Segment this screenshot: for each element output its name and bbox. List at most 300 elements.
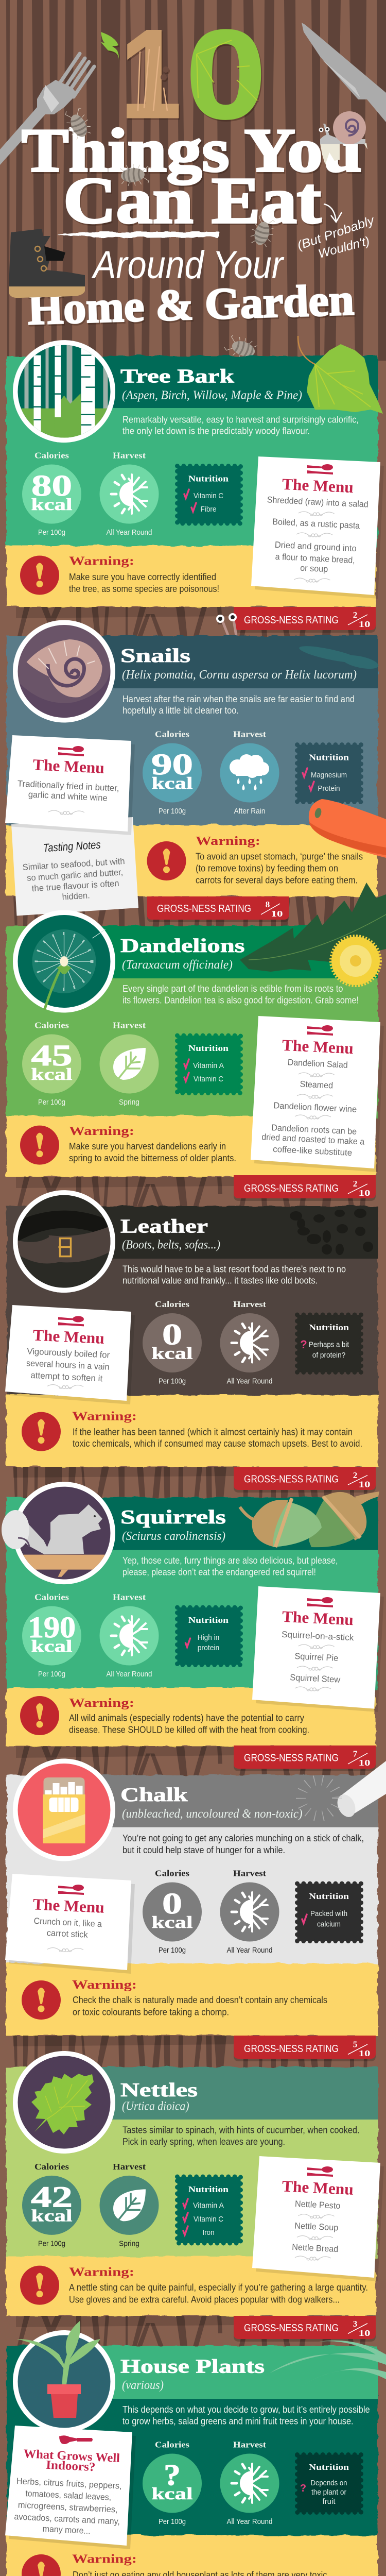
- menu card: [5, 1305, 135, 1404]
- tasting notes card: hidden.: [62, 890, 90, 902]
- illustration: dandelion clock: [13, 910, 115, 1013]
- tasting notes card: the true flavour is often: [31, 878, 119, 893]
- description: [122, 1833, 364, 1855]
- card list: microgreens, strawberries,: [17, 2500, 118, 2515]
- description: Yep, those cute, furry things are also delicious, but please,: [122, 1555, 338, 1566]
- menu card: attempt to soften it: [30, 1370, 103, 1383]
- illustration: large plant blades: [270, 2341, 386, 2395]
- stat: harvest: All Year Round: [106, 1670, 152, 1679]
- card list: [14, 2476, 122, 2536]
- menu card: Boiled, as a rustic pasta: [272, 517, 360, 531]
- section: tree bark: [6, 336, 384, 607]
- gross-ness rating: tree bark: [234, 607, 376, 633]
- nutrition box: Nutrition: [309, 1891, 349, 1901]
- stat: harvest: Harvest: [113, 2162, 146, 2172]
- menu card: Nettle Bread: [292, 2242, 339, 2254]
- gross-ness rating: leather: 2: [353, 1470, 357, 1480]
- stat: calories: 190: [28, 1611, 76, 1644]
- panel: leather header: [98, 1206, 378, 1259]
- wood gap: [13, 2036, 369, 2079]
- stat: calories: Per 100g: [38, 1098, 65, 1107]
- warning: To avoid an upset stomach, ‘purge’ the snails: [196, 851, 363, 861]
- stat: harvest: Harvest: [113, 1592, 146, 1602]
- stat: harvest: [220, 1299, 279, 1386]
- description: [122, 414, 359, 436]
- wood gap: [16, 1747, 367, 1783]
- gross-ness rating: snails: GROSS-NESS RATING: [157, 903, 251, 914]
- section: house plants: [5, 2321, 386, 2576]
- panel: squirrels header: [98, 1498, 378, 1550]
- tasting notes card: [11, 817, 138, 916]
- wood gap: [16, 607, 367, 643]
- card list: Herbs, citrus fruits, peppers,: [16, 2476, 122, 2491]
- title: Leather: [120, 1215, 208, 1237]
- description: Harvest after the rain when the snails are far easier to find and: [122, 693, 355, 704]
- stat: harvest: All Year Round: [106, 528, 152, 537]
- title line: can eat: Can Eat: [63, 164, 321, 237]
- menu card: garlic and white wine: [28, 789, 108, 803]
- stat: calories: Calories: [155, 1868, 189, 1878]
- stat: calories: [143, 730, 202, 816]
- warning: toxic chemicals, which if consumed may cause stomach upsets. Best to avoid.: [73, 1438, 362, 1449]
- panel: leather warning: [6, 1395, 378, 1467]
- menu card: Crunch on it, like a: [33, 1916, 102, 1929]
- gross-ness rating: leather: 10: [358, 1480, 371, 1489]
- header illustration: knife: [302, 23, 386, 122]
- menu card: The Menu: [282, 475, 354, 496]
- stat: calories: kcal: [31, 2207, 72, 2225]
- wood gap below snails: [13, 896, 369, 940]
- arrow to aside: [324, 204, 342, 222]
- panel: snails header: [98, 636, 378, 688]
- subtitle: (unbleached, uncoloured & non-toxic): [122, 1807, 303, 1821]
- warning: (to remove toxins) by feeding them on: [196, 863, 338, 874]
- menu card: Vigourously boiled for: [27, 1346, 110, 1360]
- warning: [20, 2266, 368, 2305]
- description: Every single part of the dandelion is edible from its roots to: [122, 983, 343, 994]
- panel: house plants body: [7, 2346, 378, 2537]
- nutrition box: Nutrition: [188, 1615, 229, 1625]
- menu card: [251, 456, 384, 599]
- panel: nettles header: [98, 2067, 378, 2120]
- stat: calories: kcal: [31, 1065, 72, 1084]
- nutrition box: [297, 2454, 361, 2512]
- warning: the tree, as some species are poisonous!: [69, 584, 219, 594]
- decoration: boot tread: [290, 1209, 373, 1255]
- warning: [22, 2552, 329, 2576]
- warning: Warning:: [196, 835, 260, 848]
- title: Nettles: [120, 2079, 198, 2101]
- gross-ness rating: chalk: 10: [358, 2048, 371, 2058]
- stat: calories: Calories: [34, 2162, 69, 2172]
- nutrition box: the plant or: [311, 2488, 346, 2497]
- gross-ness rating: snails: 10: [271, 909, 283, 919]
- panel: dandelions header: [98, 926, 378, 978]
- section: dandelions: [6, 883, 386, 1177]
- stat: harvest: [100, 1592, 159, 1679]
- illustration: chalk box: [13, 1759, 115, 1861]
- menu card: Dandelion flower wine: [273, 1100, 357, 1114]
- nutrition box: Protein: [318, 784, 340, 793]
- menu card: The Menu: [282, 1036, 354, 1057]
- wood gap: [16, 1177, 367, 1213]
- stat: calories: Calories: [34, 1020, 69, 1030]
- warning: Make sure you have correctly identified: [69, 572, 216, 582]
- latin name: (Urtica dioica): [122, 2100, 189, 2113]
- latin name: (Sciurus carolinensis): [122, 1530, 225, 1543]
- gross-ness rating: tree bark: 10: [358, 619, 371, 629]
- stat: calories: Per 100g: [159, 1377, 186, 1386]
- stat: harvest: [100, 1020, 159, 1107]
- title: Squirrels: [120, 1506, 226, 1528]
- stat: harvest: Spring: [119, 1098, 139, 1107]
- menu card: The Menu: [282, 2177, 354, 2198]
- gross-ness rating: squirrels: GROSS-NESS RATING: [244, 1753, 339, 1764]
- nutrition box: High in: [198, 1633, 219, 1642]
- description: its flowers. Dandelion tea is also good for digestion. Grab some!: [122, 994, 359, 1006]
- panel: squirrels body: [6, 1498, 378, 1690]
- warning: Warning:: [69, 1125, 134, 1138]
- menu card: Squirrel-on-a-stick: [282, 1630, 354, 1642]
- icon: boot: [9, 229, 85, 298]
- stat: harvest: All Year Round: [226, 1946, 273, 1955]
- nutrition box: [297, 1315, 361, 1372]
- illustration: carrot: [309, 799, 386, 858]
- description: Tastes similar to spinach, with hints of cucumber, when cooked.: [122, 2125, 360, 2136]
- menu card: Nettle Pesto: [295, 2199, 341, 2211]
- menu card: coffee-like substitute: [273, 1144, 353, 1158]
- stat: calories: kcal: [151, 1345, 192, 1363]
- numeral 0 as leaf: 0: [186, 4, 266, 145]
- stat: calories: Calories: [155, 2440, 189, 2449]
- gross-ness rating: leather: GROSS-NESS RATING: [244, 1474, 339, 1485]
- description: This would have to be a last resort food as there’s next to no: [122, 1264, 346, 1275]
- wood gap: [16, 2316, 367, 2352]
- illustration: squirrel: [2, 1482, 115, 1584]
- stat: harvest: Harvest: [113, 1020, 146, 1030]
- illustration: acorns: [240, 1492, 379, 1547]
- description: Pick in early spring, when leaves are young.: [122, 2136, 285, 2147]
- nutrition box: ?: [300, 2483, 306, 2494]
- warning: [147, 835, 363, 885]
- panel: tree bark header: [98, 356, 378, 408]
- menu card: a flour to make bread,: [275, 552, 355, 565]
- aside: but probably wouldn't: (But Probably: [295, 213, 377, 253]
- panel: squirrels warning: [6, 1688, 376, 1747]
- stat: calories: kcal: [151, 1913, 192, 1932]
- panel: snails body: [7, 636, 378, 827]
- gross-ness rating: dandelions: 2: [353, 1179, 357, 1189]
- stat: calories: 0: [162, 1887, 182, 1920]
- stat: calories: ?: [164, 2458, 181, 2492]
- stat: harvest: [100, 2162, 159, 2248]
- illustration: belt: [13, 1190, 115, 1293]
- menu card: Traditionally fried in butter,: [17, 778, 119, 793]
- nutrition box: calcium: [317, 1920, 341, 1929]
- panel: house plants warning: [6, 2535, 378, 2576]
- menu card: [252, 1586, 384, 1712]
- nutrition box: [177, 466, 241, 523]
- menu card: Squirrel Stew: [290, 1672, 341, 1685]
- gross-ness rating: squirrels: 7: [353, 1749, 358, 1759]
- stat: harvest: [220, 2440, 279, 2526]
- panel: tree bark warning: [6, 546, 376, 607]
- nutrition box: of protein?: [312, 1351, 345, 1360]
- nutrition box: [177, 1036, 241, 1093]
- stat: calories: [22, 1592, 81, 1679]
- warning: If the leather has been tanned (which it almost certainly has) it may contain: [73, 1427, 353, 1437]
- title: Dandelions: [120, 935, 245, 957]
- nutrition box: Vitamin C: [194, 2215, 223, 2224]
- stat: harvest: Harvest: [233, 1299, 266, 1309]
- latin names: (Helix pomatia, Cornu aspersa or Helix lucorum): [122, 668, 357, 682]
- panel: chalk warning: [6, 1963, 378, 2036]
- gross-ness rating: nettles: [234, 2316, 376, 2342]
- warning: spring to avoid the bitterness of older plants.: [69, 1153, 236, 1163]
- numeral 1 in wood: 1: [120, 3, 181, 144]
- stat: harvest: Harvest: [233, 730, 266, 739]
- nutrition box: Nutrition: [309, 1323, 349, 1332]
- menu card: dried and roasted to make a: [261, 1132, 365, 1147]
- stat: calories: Calories: [155, 730, 189, 739]
- stat: calories: Calories: [34, 450, 69, 461]
- stat: calories: 45: [31, 1039, 72, 1072]
- stat: calories: kcal: [151, 774, 192, 793]
- description: please, please don’t eat the endangered red squirrel!: [122, 1566, 316, 1578]
- wood gap: [13, 1467, 369, 1511]
- warning: [20, 1696, 309, 1735]
- description: [122, 2404, 370, 2427]
- nutrition box: Depends on: [311, 2479, 347, 2487]
- warning: A nettle sting can be quite painful, especially if you’re gathering a large quantity.: [69, 2282, 368, 2293]
- icon: snail on title: [319, 111, 367, 165]
- nutrition box: Magnesium: [311, 771, 347, 779]
- gross-ness rating: nettles: 10: [358, 2328, 371, 2338]
- menu card: The Menu: [32, 755, 105, 777]
- card list: avocados, carrots and many,: [14, 2512, 120, 2527]
- menu card: [252, 2156, 384, 2281]
- nutrition box: [297, 1884, 361, 1941]
- menu card: Dried and ground into: [274, 540, 357, 553]
- header illustration: fork: [0, 54, 94, 165]
- stat: harvest: Harvest: [233, 1868, 266, 1878]
- nutrition box: [177, 2177, 241, 2243]
- warning: carrots for several days before eating them.: [196, 875, 358, 885]
- menu card: Squirrel Pie: [294, 1651, 339, 1663]
- subtitle: (various): [122, 2379, 164, 2392]
- stat: calories: [143, 2440, 202, 2526]
- warning: Warning:: [69, 1697, 134, 1710]
- title line: around your: Around Your: [91, 243, 284, 287]
- warning: Warning:: [69, 555, 134, 568]
- description: but it could help stave of hunger for a while.: [122, 1844, 285, 1855]
- illustration: nettle leaf: [13, 2051, 115, 2154]
- warning: [20, 555, 219, 595]
- icon: woodlice on title: [61, 104, 277, 363]
- warning: Warning:: [72, 1410, 137, 1423]
- stat: calories: [22, 2162, 81, 2248]
- stat: calories: kcal: [151, 2485, 192, 2503]
- gross-ness rating: nettles: GROSS-NESS RATING: [244, 2323, 339, 2334]
- stat: calories: kcal: [31, 496, 72, 514]
- nutrition box: Vitamin C: [194, 1075, 223, 1083]
- stat: calories: 90: [151, 748, 193, 781]
- stat: calories: [22, 1020, 81, 1107]
- stat: calories: [143, 1299, 202, 1386]
- stat: harvest: All Year Round: [226, 2517, 273, 2526]
- gross-ness rating: leather: [234, 1467, 376, 1493]
- stat: calories: Per 100g: [38, 1670, 65, 1679]
- stat: calories: Calories: [155, 1299, 189, 1309]
- illustration: chalk stick: [301, 1761, 386, 1820]
- stat: calories: Per 100g: [38, 528, 65, 537]
- nutrition box: fruit: [322, 2497, 336, 2506]
- stat: calories: kcal: [31, 1637, 72, 1656]
- illustration: birch leaf: [298, 336, 383, 414]
- stat: calories: Calories: [34, 1592, 69, 1602]
- icon: trowel: [59, 2435, 93, 2444]
- illustration: snail shell: [13, 620, 115, 722]
- menu card: several hours in a vain: [26, 1358, 110, 1372]
- panel: dandelions body: [6, 926, 378, 1118]
- description: [122, 1264, 346, 1286]
- nutrition box: Nutrition: [309, 2462, 349, 2472]
- description: Remarkably versatile, easy to harvest and surprisingly calorific,: [122, 414, 359, 425]
- description: hopefully a little bit cleaner too.: [122, 705, 239, 716]
- description: [122, 2125, 360, 2147]
- section: chalk: [5, 1759, 386, 2036]
- menu card: [251, 1016, 384, 1172]
- warning: Warning:: [69, 2266, 134, 2279]
- warning: [22, 1978, 327, 2020]
- tasting notes card: so much garlic and butter,: [27, 867, 124, 883]
- gross-ness rating: chalk: 5: [353, 2039, 357, 2049]
- panel: chalk body: [7, 1775, 378, 1965]
- gross-ness rating: chalk: GROSS-NESS RATING: [244, 2043, 339, 2055]
- menu card: Nettle Soup: [294, 2221, 339, 2233]
- gross-ness rating: dandelions: [234, 1175, 376, 1201]
- stat: harvest: After Rain: [234, 807, 266, 816]
- description: the only let down is the predictably woody flavour.: [122, 425, 310, 436]
- panel: tree bark body: [6, 356, 378, 548]
- gross-ness rating: chalk: [234, 2036, 376, 2061]
- stat: harvest: Harvest: [113, 450, 146, 461]
- warning: All wild animals (especially rodents) have the potential to carry: [69, 1713, 304, 1723]
- illustration: dandelion flower: [331, 937, 380, 985]
- gross-ness rating: snails: 8: [266, 900, 270, 909]
- what grows well card: [5, 2426, 136, 2549]
- section: snails: [5, 613, 386, 916]
- stat: calories: [22, 450, 81, 537]
- stat: calories: 42: [31, 2180, 73, 2213]
- menu card: Shredded (raw) into a salad: [267, 495, 369, 510]
- stat: calories: Per 100g: [38, 2239, 65, 2248]
- section: leather: [5, 1190, 378, 1467]
- illustration: birch forest: [13, 340, 115, 443]
- nutrition box: Nutrition: [188, 474, 229, 483]
- warning: Warning:: [72, 2552, 137, 2566]
- section: squirrels: [2, 1482, 384, 1747]
- menu card: The Menu: [32, 1326, 105, 1347]
- tasting notes card: Tasting Notes: [43, 838, 101, 854]
- menu card: [5, 735, 135, 835]
- brush stroke divider: [57, 232, 219, 238]
- menu card: The Menu: [282, 1607, 354, 1629]
- nutrition box: Perhaps a bit: [309, 1341, 349, 1349]
- gross-ness rating: snails: [147, 896, 289, 922]
- title line: home and garden: Home & Garden: [27, 275, 355, 334]
- menu card: carrot stick: [46, 1928, 89, 1940]
- stat: calories: Per 100g: [159, 1946, 186, 1955]
- warning: or toxic colourants before taking a chomp.: [73, 2007, 229, 2018]
- stat: calories: [143, 1868, 202, 1955]
- nutrition box: Fibre: [201, 505, 216, 514]
- illustration: potted plant: [13, 2321, 115, 2433]
- warning: [22, 1410, 362, 1451]
- aside: but probably wouldn't: Wouldn't): [317, 234, 371, 261]
- nutrition box: Vitamin A: [193, 1061, 224, 1070]
- stat: harvest: [220, 730, 279, 816]
- nutrition box: Packed with: [310, 1909, 347, 1918]
- nutrition box: [177, 1607, 241, 1665]
- icon: snail eyes: [216, 613, 237, 639]
- stat: calories: 80: [31, 469, 72, 502]
- card list: tomatoes, salad leaves,: [25, 2488, 112, 2502]
- decoration: snail trail: [298, 643, 380, 671]
- warning: Use gloves and be extra careful. Avoid places popular with dog walkers...: [69, 2294, 340, 2304]
- numeral 1 in wood: [101, 3, 181, 144]
- card heading: [23, 2447, 120, 2474]
- panel: nettles warning: [6, 2257, 376, 2316]
- gross-ness rating: dandelions: 10: [358, 1188, 371, 1198]
- title: House Plants: [120, 2356, 265, 2378]
- section: nettles: [6, 2051, 384, 2316]
- big number 10: [101, 3, 266, 145]
- gross-ness rating: tree bark: 2: [353, 610, 357, 620]
- warning: Warning:: [72, 1978, 137, 1992]
- title: Tree Bark: [120, 366, 235, 387]
- nutrition box: Vitamin A: [193, 2201, 224, 2210]
- latin name: (Taraxacum officinale): [122, 958, 233, 972]
- menu card: The Menu: [32, 1895, 105, 1917]
- stat: harvest: Spring: [119, 2239, 139, 2248]
- warning: disease. These SHOULD be killed off with the heat from cooking.: [69, 1725, 309, 1735]
- gross-ness rating: squirrels: [234, 1745, 376, 1771]
- nutrition box: Nutrition: [188, 1043, 229, 1053]
- gross-ness rating: tree bark: GROSS-NESS RATING: [244, 615, 339, 626]
- menu card: Dandelion Salad: [287, 1057, 348, 1070]
- card list: many more...: [42, 2524, 91, 2536]
- warning: Make sure you harvest dandelions early in: [69, 1141, 226, 1151]
- description: [122, 983, 359, 1006]
- stat: harvest: [220, 1868, 279, 1955]
- nutrition box: [297, 745, 361, 802]
- nutrition box: protein: [198, 1643, 219, 1652]
- gross-ness rating: squirrels: 10: [358, 1758, 371, 1768]
- panel: house plants header: [98, 2346, 378, 2399]
- title line: things you: Things You: [22, 116, 362, 185]
- title: Chalk: [120, 1784, 188, 1806]
- panel: chalk header: [98, 1775, 378, 1827]
- card heading: Indoors?: [46, 2459, 96, 2474]
- illustration: dandelion leaf: [240, 883, 386, 972]
- stat: calories: Per 100g: [159, 2517, 186, 2526]
- panel: dandelions warning: [6, 1116, 376, 1177]
- panel: nettles body: [6, 2067, 378, 2259]
- stat: calories: Per 100g: [159, 807, 186, 816]
- stat: harvest: All Year Round: [226, 1377, 273, 1386]
- gross-ness rating: nettles: 3: [353, 2319, 357, 2329]
